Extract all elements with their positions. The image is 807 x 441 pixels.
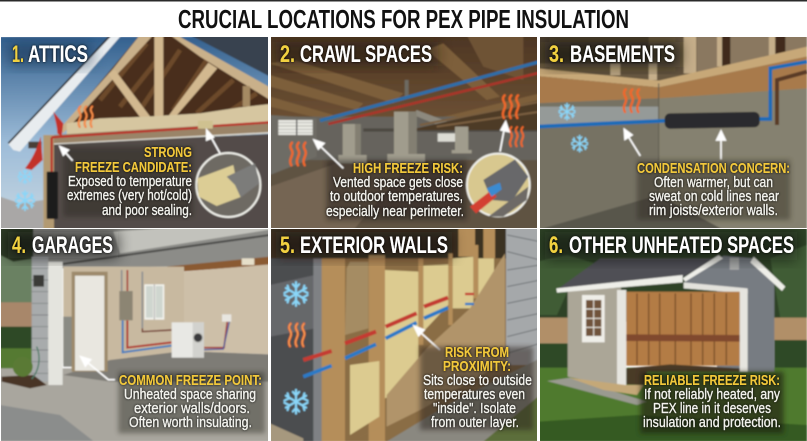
panel 2 callout: especially near perimeter. xyxy=(326,204,464,220)
title shade xyxy=(276,42,438,66)
panel 2 callout xyxy=(326,160,464,220)
panel 1 callout: extremes (very hot/cold) xyxy=(67,188,192,204)
shed side wall xyxy=(684,256,774,372)
panel 1 callout xyxy=(67,144,192,219)
arrow xyxy=(414,326,440,350)
blue pipe xyxy=(320,62,540,121)
panel 2 callout: to outdoor temperatures, xyxy=(330,189,463,205)
panel 6 callout xyxy=(643,372,781,431)
vent xyxy=(730,258,739,270)
panel 4 heading xyxy=(12,232,113,259)
panel 5 callout: from outer layer. xyxy=(431,415,519,431)
title: CRUCIAL LOCATIONS FOR PEX PIPE INSULATION xyxy=(178,4,629,34)
panel: crawl spaces xyxy=(270,33,540,230)
panel 4 heading: GARAGES xyxy=(32,232,113,259)
beam and trim xyxy=(53,122,270,145)
shrub and hose xyxy=(2,347,47,388)
trees background xyxy=(537,225,807,322)
panel 2 heading xyxy=(280,41,432,68)
wall lamp xyxy=(33,275,44,287)
back wall xyxy=(63,267,184,363)
hedge xyxy=(0,327,33,349)
inset circle: insulated pipes xyxy=(467,154,530,217)
panel 5 callout: RISK FROM xyxy=(445,344,509,361)
panel 3 callout: Often warmer, but can xyxy=(654,175,773,191)
panel 6 callout: PEX line in it deserves xyxy=(653,401,771,417)
floor xyxy=(270,160,540,230)
red pipe xyxy=(303,298,448,360)
electrical panel xyxy=(119,291,133,320)
opening corner posts xyxy=(617,290,748,385)
shed front wall xyxy=(568,288,621,388)
fence xyxy=(537,318,807,343)
sill plates xyxy=(537,47,807,87)
heat icon xyxy=(289,324,304,346)
panel 5 heading: 5. xyxy=(280,232,295,259)
panel 5 heading: EXTERIOR WALLS xyxy=(300,232,448,259)
panel 2 callout: HIGH FREEZE RISK: xyxy=(353,160,463,177)
fence xyxy=(0,302,33,327)
panel 4 callout: Often worth insulating. xyxy=(129,415,252,431)
panel: garages xyxy=(0,225,270,441)
panel 5 callout: "inside". Isolate xyxy=(433,401,516,417)
roof xyxy=(559,258,719,288)
blue pipe xyxy=(303,308,448,377)
panel 3 callout: rim joists/exterior walls. xyxy=(649,203,778,219)
clamp insulation xyxy=(198,121,213,129)
panel 1 callout: STRONG xyxy=(144,144,192,161)
red air arrows xyxy=(25,112,63,170)
panel 2 callout: Vented space gets close xyxy=(333,175,463,191)
floor of shed xyxy=(626,364,740,385)
attic insulation xyxy=(67,104,270,137)
snowflake icons xyxy=(16,170,34,210)
panel 1 heading xyxy=(12,41,88,68)
panel 4 callout: COMMON FREEZE POINT: xyxy=(119,372,262,389)
panel 6 callout: If not reliably heated, any xyxy=(644,387,780,403)
text shade xyxy=(640,372,784,433)
panel: basements xyxy=(537,33,807,230)
arrow xyxy=(81,357,115,380)
hedge xyxy=(537,340,807,369)
panel 4 callout xyxy=(119,372,262,431)
title shade xyxy=(8,42,92,66)
vertical pipe insulation xyxy=(47,172,58,219)
gable rafters xyxy=(60,35,270,133)
panel 1 heading: 1. xyxy=(12,41,24,68)
joists xyxy=(271,43,537,117)
roof shingles xyxy=(190,35,270,77)
blue pipe xyxy=(537,62,807,127)
wood interior xyxy=(626,292,740,366)
title shade xyxy=(545,42,680,67)
back wall xyxy=(300,116,537,161)
roof trim xyxy=(556,255,785,293)
far window xyxy=(438,133,455,142)
panel 5 heading xyxy=(280,232,448,259)
panel 3 callout: sweat on cold lines near xyxy=(649,189,779,205)
garage floor xyxy=(63,351,270,382)
title shade xyxy=(276,232,452,258)
cold exterior background xyxy=(270,225,323,441)
panel 6 heading: 6. xyxy=(549,232,563,259)
red pipe xyxy=(328,73,540,124)
gravel strip xyxy=(547,378,647,405)
black foam sleeve xyxy=(665,112,760,129)
top shadow xyxy=(270,225,510,258)
insulation batts xyxy=(350,257,494,435)
driveway xyxy=(0,368,270,441)
heat icon xyxy=(79,106,93,127)
corner trim board xyxy=(43,135,54,230)
panel 3 heading xyxy=(549,41,675,68)
sky background xyxy=(1,37,268,203)
panel 1 heading: ATTICS xyxy=(28,41,88,68)
side wall xyxy=(184,264,270,354)
panel 4 callout: exterior walls/doors. xyxy=(134,401,250,417)
shed window xyxy=(582,295,605,342)
door trim xyxy=(48,262,63,385)
snowflake icons xyxy=(284,282,308,414)
lawn xyxy=(537,368,807,441)
panel 4 callout: Unheated space sharing xyxy=(124,387,256,403)
left wall xyxy=(270,115,317,175)
garage ceiling xyxy=(33,225,270,268)
text shade xyxy=(327,160,467,220)
ceiling xyxy=(271,37,537,118)
small pipe stubs xyxy=(465,290,474,297)
attic interior xyxy=(73,37,268,124)
trees outside xyxy=(0,225,33,305)
panel 3 heading: 3. xyxy=(549,41,564,68)
entry door xyxy=(75,276,104,371)
panel 2 heading: 2. xyxy=(280,41,295,68)
title shade xyxy=(8,232,118,258)
wall base colour xyxy=(270,225,540,441)
panel 1 callout: Exposed to temperature xyxy=(68,174,192,190)
inset circle: insulation detail xyxy=(196,153,260,217)
heat icon xyxy=(624,89,639,112)
support strut xyxy=(405,80,409,97)
panel 1 callout: and poor sealing. xyxy=(102,203,192,219)
panel 3 callout xyxy=(637,160,790,219)
text shade xyxy=(420,347,533,430)
panel 1 callout: FREEZE CANDIDATE: xyxy=(75,159,192,176)
upper wall framing xyxy=(540,37,806,88)
roof edge xyxy=(8,35,122,152)
concrete wall xyxy=(537,88,807,230)
arrows xyxy=(624,129,725,159)
concrete columns xyxy=(338,112,472,163)
text shade xyxy=(118,372,265,433)
panel 5 callout: PROXIMITY: xyxy=(443,358,511,375)
title shade xyxy=(545,232,797,260)
floor xyxy=(537,195,724,230)
arrows xyxy=(60,130,220,161)
heat icons xyxy=(290,95,523,165)
panel 6 callout: insulation and protection. xyxy=(643,415,781,431)
truss members xyxy=(110,37,218,118)
window xyxy=(144,284,164,320)
panel 2 heading: CRAWL SPACES xyxy=(300,41,432,68)
snowflake icons xyxy=(559,104,588,152)
text shade xyxy=(63,147,193,217)
OSB sheathing xyxy=(387,253,505,427)
panel: other unheated spaces xyxy=(537,225,807,441)
panel 5 callout: temperatures even xyxy=(424,387,525,403)
panel 3 heading: BASEMENTS xyxy=(570,41,675,68)
panel 5 callout xyxy=(423,344,532,431)
arrows xyxy=(314,122,509,168)
red pipe xyxy=(52,122,270,173)
siding xyxy=(32,257,48,382)
panel 5 callout: Sits close to outside xyxy=(423,373,532,389)
pipes xyxy=(125,270,130,291)
panel: exterior walls xyxy=(270,225,540,441)
rust line xyxy=(777,72,807,125)
wall xyxy=(53,134,270,230)
studs xyxy=(322,228,495,441)
washer xyxy=(172,322,204,358)
panel: attics xyxy=(0,35,270,230)
text shade xyxy=(637,160,790,220)
panel 4 heading: 4. xyxy=(12,232,26,259)
vent window xyxy=(278,120,313,135)
lawn xyxy=(0,348,33,370)
siding xyxy=(506,225,540,365)
lawn xyxy=(483,395,540,441)
